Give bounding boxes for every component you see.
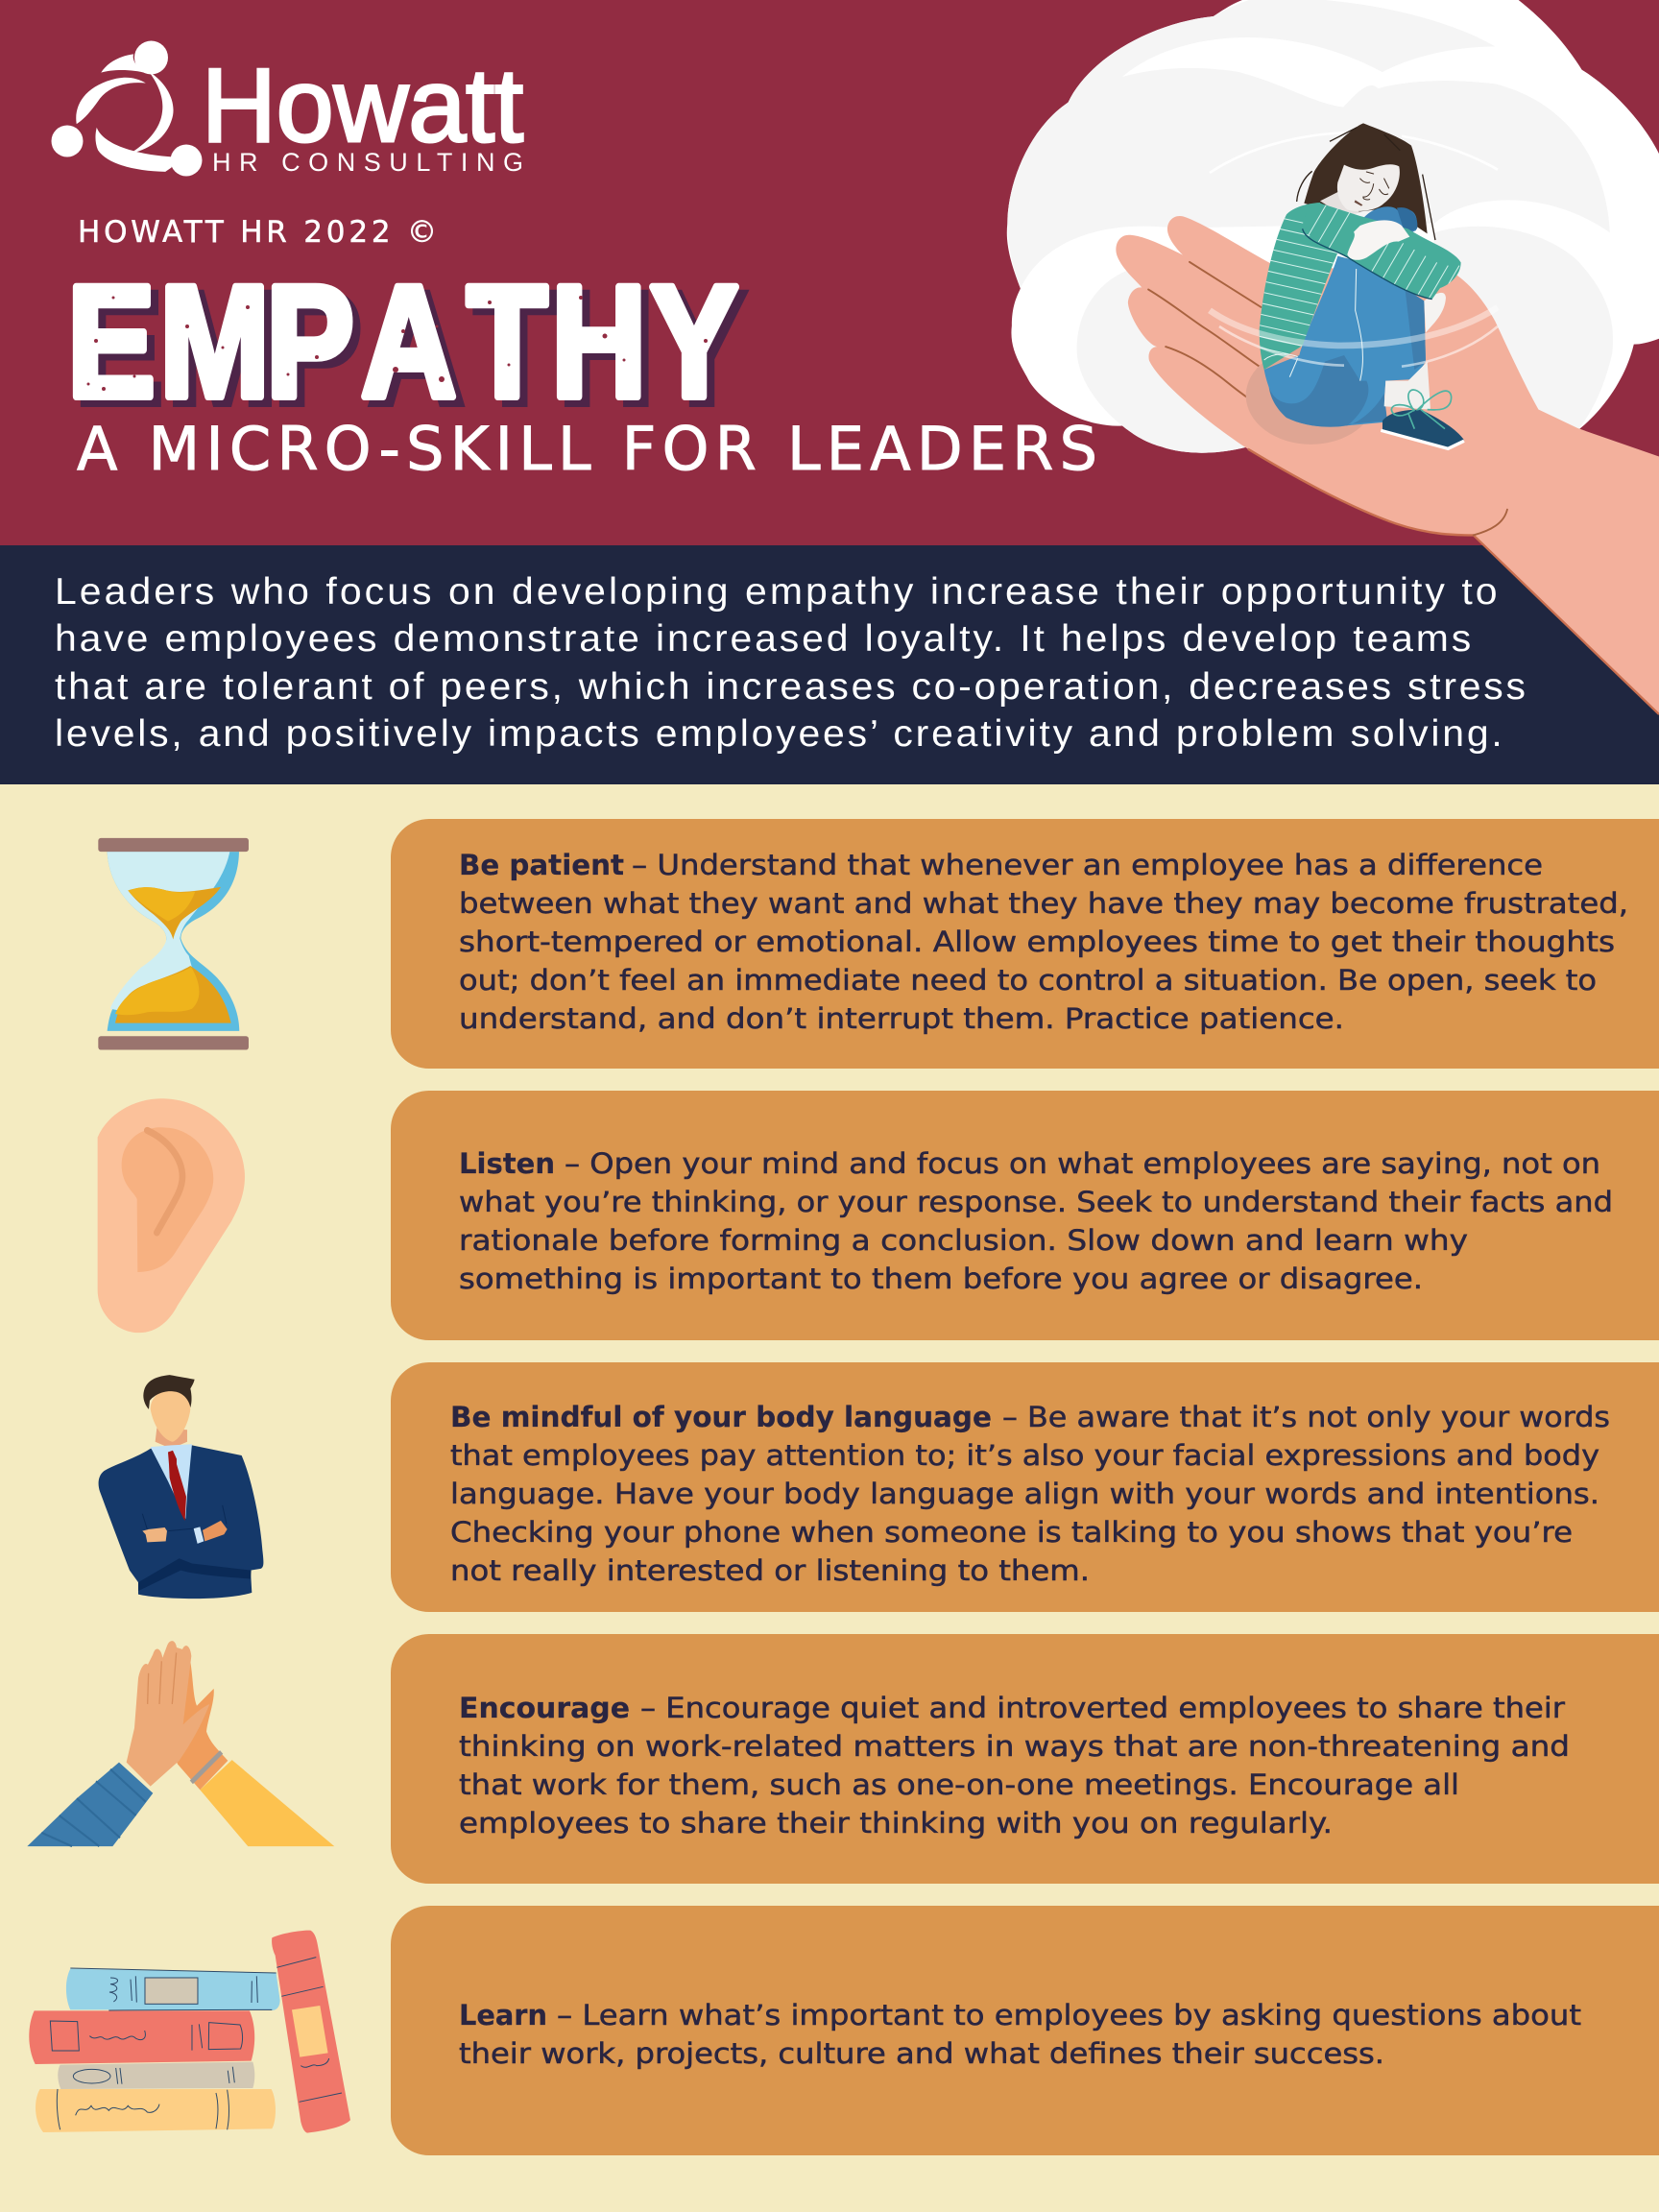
- intro paragraph: have employees demonstrate increased loyalty. It helps develop teams: [55, 618, 1471, 660]
- intro paragraph: levels, and positively impacts employees’ creativity and problem solving.: [55, 713, 1503, 755]
- icon: businessman with crossed arms: [99, 1375, 263, 1599]
- intro paragraph: that are tolerant of peers, which increases co-operation, decreases stress: [55, 666, 1526, 708]
- logo: Howatt HR Consulting: Howatt: [202, 47, 523, 164]
- title: EMPATHY: EMPATHY: [67, 253, 738, 431]
- illustration: hand: [1116, 216, 1659, 714]
- panel: encourage: Encourage: [459, 1692, 630, 1724]
- title: EMPATHY: EMPATHY: [75, 260, 746, 438]
- panel: be mindful of your body language: language. Have your body language align with your words and intentions.: [450, 1478, 1599, 1510]
- panel: be patient: – Understand that whenever an employee has a difference: [632, 849, 1543, 881]
- panel: be mindful of your body language: Checking your phone when someone is talking to you shows that you’re: [450, 1516, 1573, 1549]
- sweater: [1260, 203, 1344, 370]
- icon: stack of books: [29, 1931, 350, 2133]
- panel: listen: [391, 1091, 1659, 1340]
- panel: learn: – Learn what’s important to employees by asking questions about: [557, 1999, 1581, 2032]
- subtitle: A MICRO-SKILL FOR LEADERS: [77, 414, 1097, 484]
- hand on arm: [1347, 220, 1409, 260]
- panel: listen: – Open your mind and focus on what employees are saying, not on: [565, 1147, 1600, 1180]
- icon: hourglass: [98, 838, 249, 1050]
- panel: encourage: [391, 1634, 1659, 1884]
- panel: learn: Learn: [459, 1999, 547, 2032]
- socks: [1384, 362, 1431, 410]
- panel: learn: their work, projects, culture and what defines their success.: [459, 2037, 1384, 2070]
- panel: encourage: employees to share their thinking with you on regularly.: [459, 1807, 1333, 1839]
- front swirl: [1210, 307, 1498, 346]
- intro paragraph: [55, 571, 1526, 755]
- panel: listen: something is important to them before you agree or disagree.: [459, 1262, 1423, 1295]
- panel: listen: Listen: [459, 1147, 555, 1180]
- panel: be mindful of your body language: Be mindful of your body language: [450, 1401, 992, 1433]
- panel: encourage: – Encourage quiet and introverted employees to share their: [640, 1692, 1565, 1724]
- illustration: cloud: [1007, 0, 1659, 466]
- copyright line: HOWATT HR 2022 ©: [78, 215, 437, 250]
- icon: ear: [98, 1098, 245, 1333]
- intro band background: [0, 545, 1659, 784]
- shoe: [1382, 410, 1464, 449]
- panel: be mindful of your body language: not really interested or listening to them.: [450, 1554, 1090, 1587]
- panel: listen: rationale before forming a conclusion. Slow down and learn why: [459, 1224, 1468, 1257]
- panel: be patient: Be patient: [459, 849, 624, 881]
- illustration: seated woman: [1210, 123, 1498, 449]
- panel: be patient: out; don’t feel an immediate need to control a situation. Be open, seek to: [459, 964, 1597, 997]
- intro paragraph: Leaders who focus on developing empathy increase their opportunity to: [55, 571, 1498, 613]
- panel: be patient: [391, 819, 1659, 1069]
- logo: Howatt HR Consulting: HR CONSULTING: [212, 148, 523, 177]
- panel: listen: what you’re thinking, or your response. Seek to understand their facts and: [459, 1186, 1613, 1218]
- header band: [0, 0, 1659, 545]
- panel: encourage: that work for them, such as one-on-one meetings. Encourage all: [459, 1768, 1459, 1801]
- back arc swirl: [1210, 132, 1498, 173]
- panel: be patient: between what they want and what they have they may become frustrated,: [459, 887, 1628, 920]
- panel: be mindful of your body language: [391, 1362, 1659, 1612]
- legs: [1264, 256, 1426, 427]
- panel: be patient: short-tempered or emotional. Allow employees time to get their thoughts: [459, 926, 1615, 958]
- panel: be mindful of your body language: – Be aware that it’s not only your words: [1002, 1401, 1610, 1433]
- icon: high five: [27, 1641, 334, 1846]
- panel: be patient: understand, and don’t interrupt them. Practice patience.: [459, 1002, 1344, 1035]
- logo: Howatt HR Consulting: [52, 40, 523, 177]
- panel: encourage: thinking on work-related matters in ways that are non-threatening and: [459, 1730, 1570, 1763]
- panel: be mindful of your body language: that employees pay attention to; it’s also your facial expressions and body: [450, 1439, 1599, 1472]
- panel: learn: [391, 1906, 1659, 2155]
